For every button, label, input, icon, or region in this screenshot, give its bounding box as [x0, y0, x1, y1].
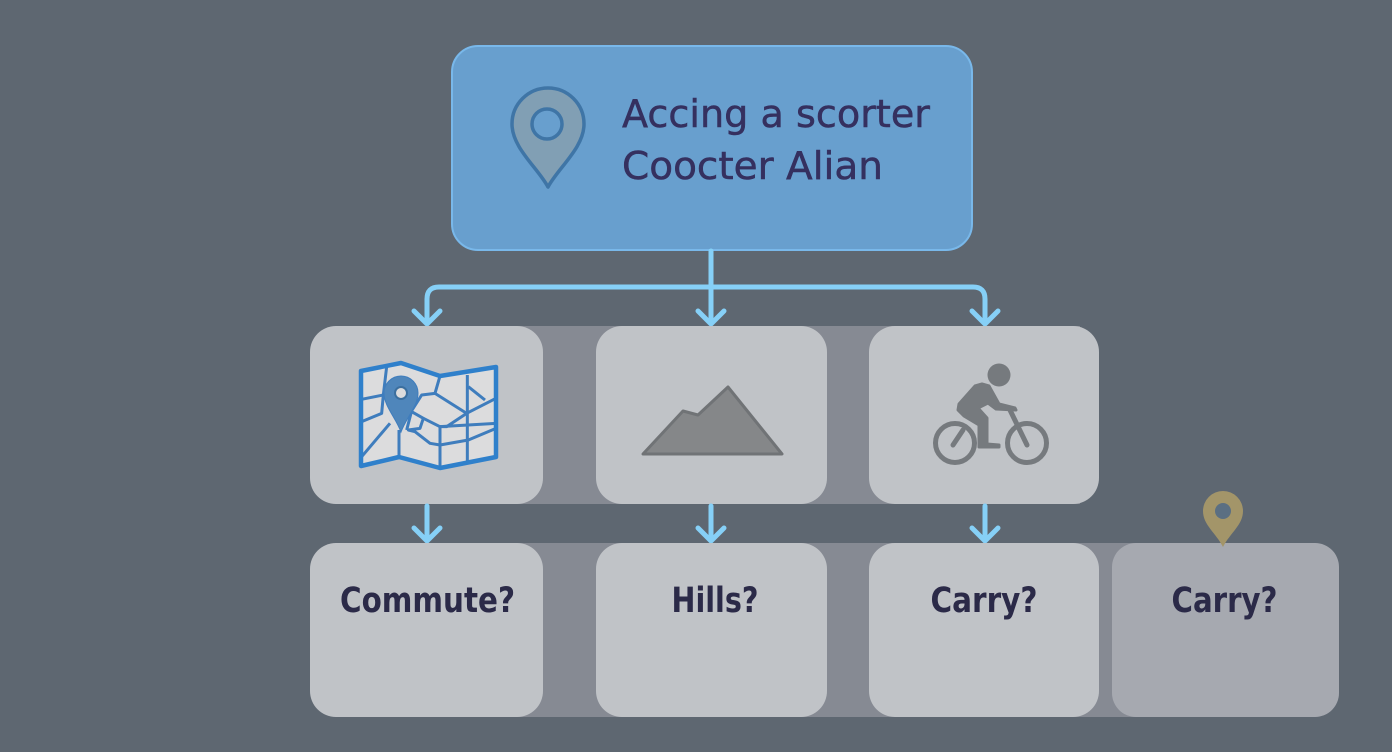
icon: folded map with pin [361, 363, 496, 468]
arrows: header to first row [414, 251, 998, 324]
icon: mountain [643, 387, 782, 454]
panel: header [452, 46, 972, 250]
panel: hills question [596, 543, 827, 717]
arrows: first row to second row [414, 506, 998, 541]
panel: carry question [869, 543, 1099, 717]
label: Hills?: Hills? [672, 581, 758, 621]
header title: Accing a scorter [622, 92, 930, 136]
icon: cyclist [936, 364, 1046, 462]
panel: hills card [596, 326, 827, 504]
panel: second carry question [1112, 543, 1339, 717]
connecting band behind second row [510, 543, 1140, 717]
icon: gold location pin [1203, 491, 1243, 547]
label: Carry? (second): Carry? [1172, 581, 1278, 621]
panel: map card [310, 326, 543, 504]
icon: header location pin [512, 88, 584, 187]
label: Commute?: Commute? [340, 581, 515, 621]
connecting band behind first row [510, 326, 1080, 504]
panel: commute question [310, 543, 543, 717]
header title: Coocter Alian [622, 144, 883, 188]
panel: cycling card [869, 326, 1099, 504]
label: Carry?: Carry? [930, 581, 1038, 621]
